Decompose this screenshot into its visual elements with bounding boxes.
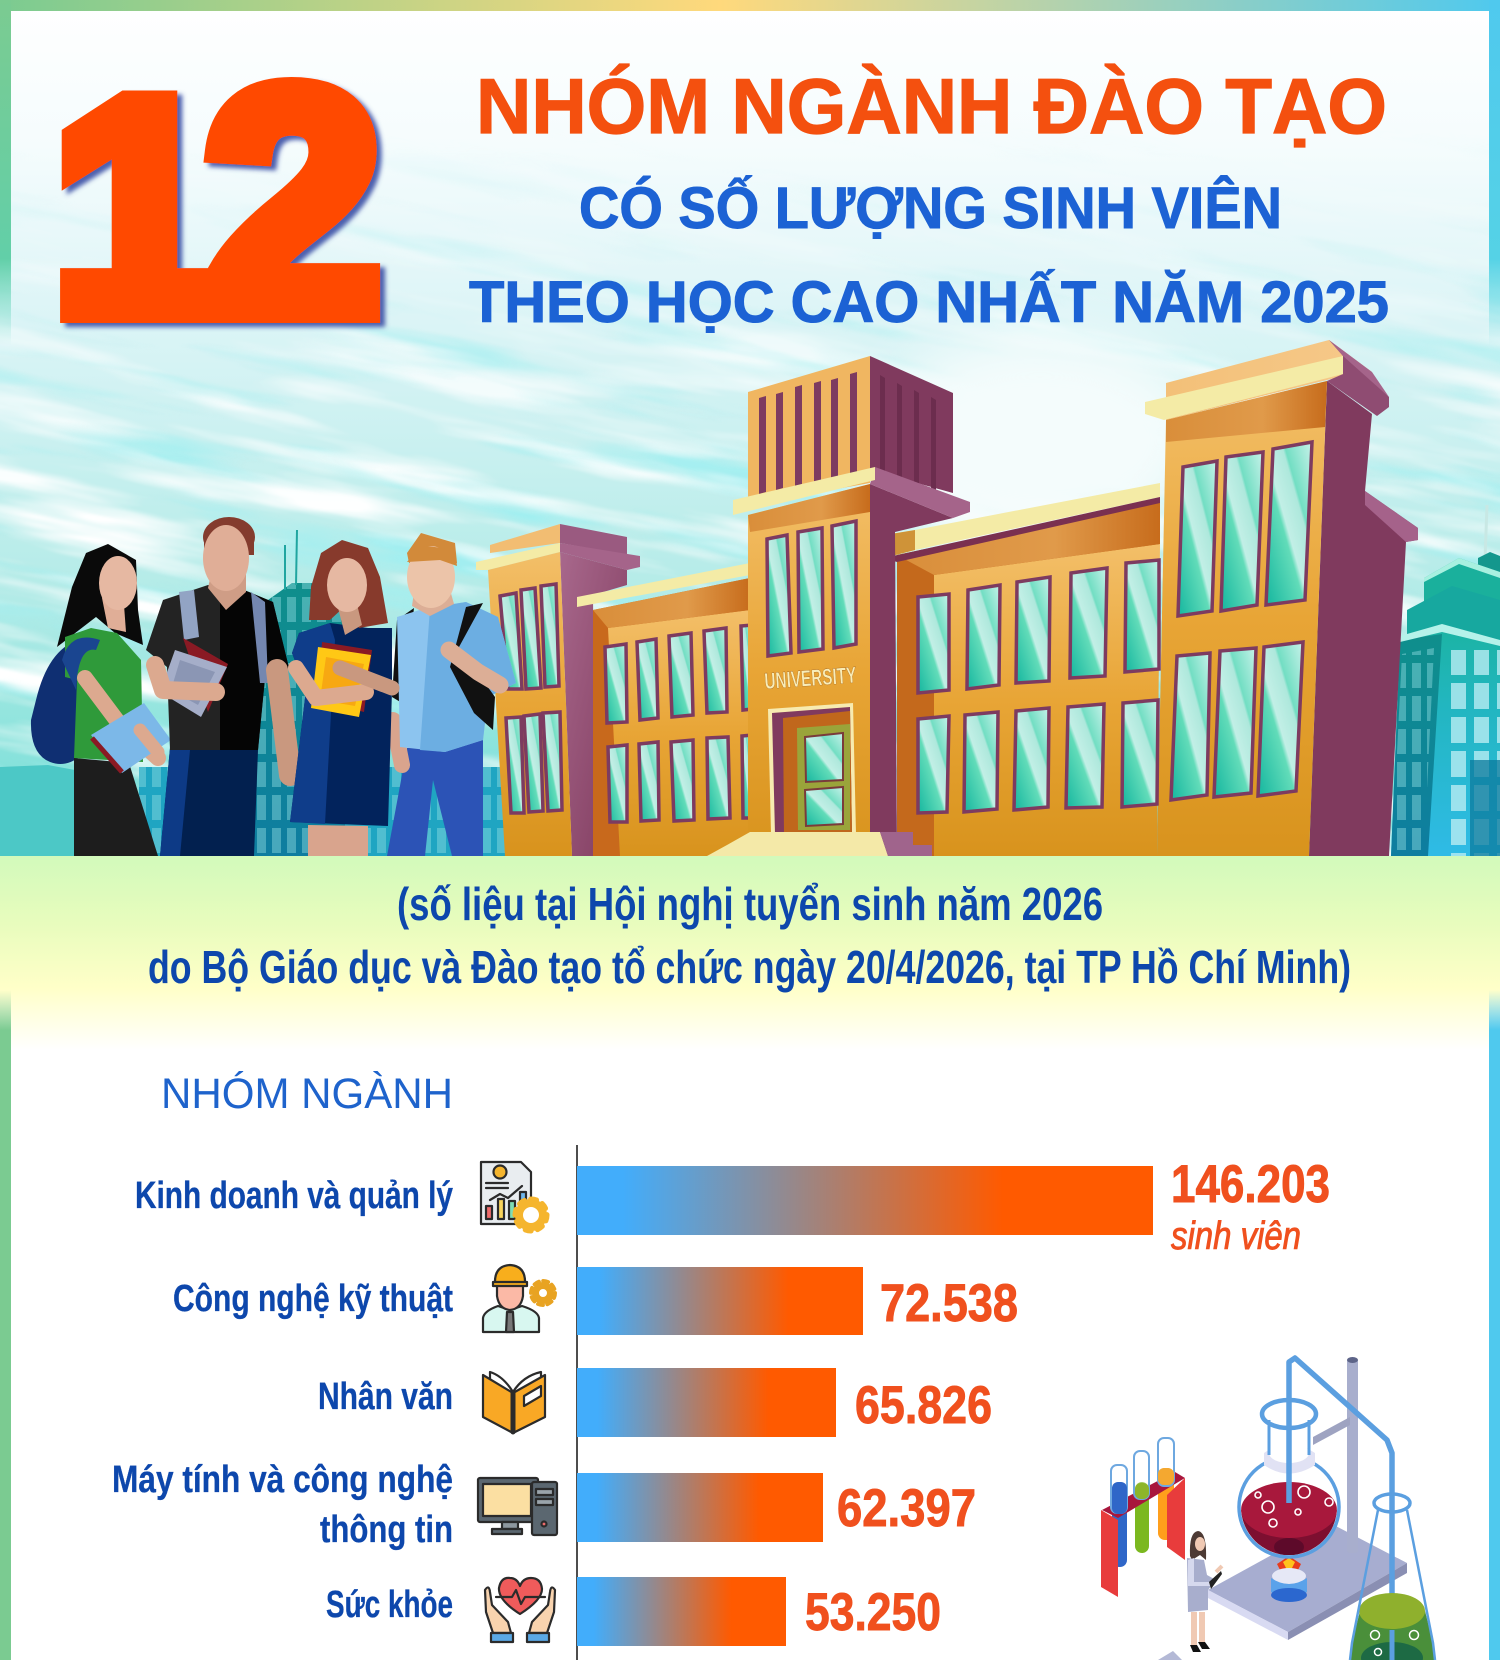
source note: (số liệu tại Hội nghị tuyển sinh năm 2026: [397, 878, 1103, 930]
title: [469, 62, 1389, 335]
student: girl in green: [31, 544, 171, 856]
student: girl in blue dress: [290, 540, 392, 856]
lab conical flask: [1350, 1494, 1435, 1660]
bar: Công nghệ kỹ thuật: 72.538: [880, 1274, 1018, 1333]
background skyscraper right: [1391, 505, 1500, 856]
icon: desktop computer: [478, 1478, 557, 1535]
bar: Sức khỏe: Sức khỏe: [326, 1584, 453, 1626]
title: NHÓM NGÀNH ĐÀO TẠO: [476, 62, 1387, 150]
chemistry lab illustration: [1101, 1357, 1435, 1660]
icon: engineer and gear: [483, 1265, 555, 1332]
students group: [31, 517, 516, 856]
title: THEO HỌC CAO NHẤT NĂM 2025: [469, 270, 1389, 335]
bar: Máy tính và công nghệ thông tin: thông tin: [320, 1509, 453, 1551]
student: boy in blue: [387, 533, 516, 856]
bar: Máy tính và công nghệ thông tin: Máy tính và công nghệ: [112, 1459, 453, 1501]
lower page border: [0, 990, 1500, 1660]
lab burner: [1271, 1556, 1307, 1602]
distant hill: [0, 765, 75, 856]
lab round flask: [1239, 1457, 1340, 1560]
bar: Nhân văn: [318, 1368, 992, 1437]
front steps: [707, 832, 932, 856]
right tower: [1145, 340, 1418, 856]
bar chart: [112, 1145, 1330, 1660]
bar: Kinh doanh và quản lý: [135, 1155, 1330, 1258]
middle right wing: [884, 483, 1160, 856]
sky background: [0, 118, 1500, 856]
icon: business report and gear: [481, 1162, 547, 1231]
bar: Kinh doanh và quản lý: sinh viên: [1171, 1215, 1301, 1258]
building sign: UNIVERSITY: [764, 662, 857, 694]
center tower: [733, 356, 970, 856]
column heading: NHÓM NGÀNH: [161, 1070, 453, 1118]
lab scientist: [1187, 1531, 1222, 1652]
big number 12: 1: [53, 38, 222, 376]
source note: [148, 878, 1351, 993]
bar: Máy tính và công nghệ thông tin: 62.397: [837, 1479, 976, 1538]
background city left: [139, 530, 509, 856]
icon: hands holding heart: [485, 1578, 555, 1642]
bar: Nhân văn: 65.826: [855, 1376, 992, 1435]
lab clamp rings: [1262, 1400, 1316, 1474]
bar: Sức khỏe: [326, 1577, 941, 1646]
icon: open book: [483, 1372, 545, 1433]
bar: Kinh doanh và quản lý: 146.203: [1171, 1155, 1330, 1214]
bar: Kinh doanh và quản lý: Kinh doanh và quản lý: [135, 1175, 453, 1217]
bar: Công nghệ kỹ thuật: Công nghệ kỹ thuật: [173, 1278, 453, 1320]
bar: Công nghệ kỹ thuật: [173, 1267, 1018, 1335]
bar: Máy tính và công nghệ thông tin: [112, 1459, 976, 1551]
student: boy in black: [146, 517, 290, 856]
lab bottom fragment: [1158, 1651, 1182, 1660]
bar: Nhân văn: Nhân văn: [318, 1376, 453, 1418]
lab test tube rack: [1101, 1438, 1185, 1597]
left tower: [476, 524, 640, 856]
bar: Sức khỏe: 53.250: [805, 1583, 941, 1642]
page border: [0, 0, 1500, 345]
lab base plate: [1208, 1523, 1407, 1640]
university building: [476, 340, 1418, 856]
lab stand rod: [1313, 1357, 1358, 1553]
title: CÓ SỐ LƯỢNG SINH VIÊN: [579, 176, 1282, 241]
lab glass tube: [1289, 1358, 1392, 1610]
middle left wing: [577, 563, 752, 856]
big number 12: 2: [204, 24, 381, 379]
light gradient band: [0, 856, 1500, 1050]
entrance door: [768, 703, 856, 834]
